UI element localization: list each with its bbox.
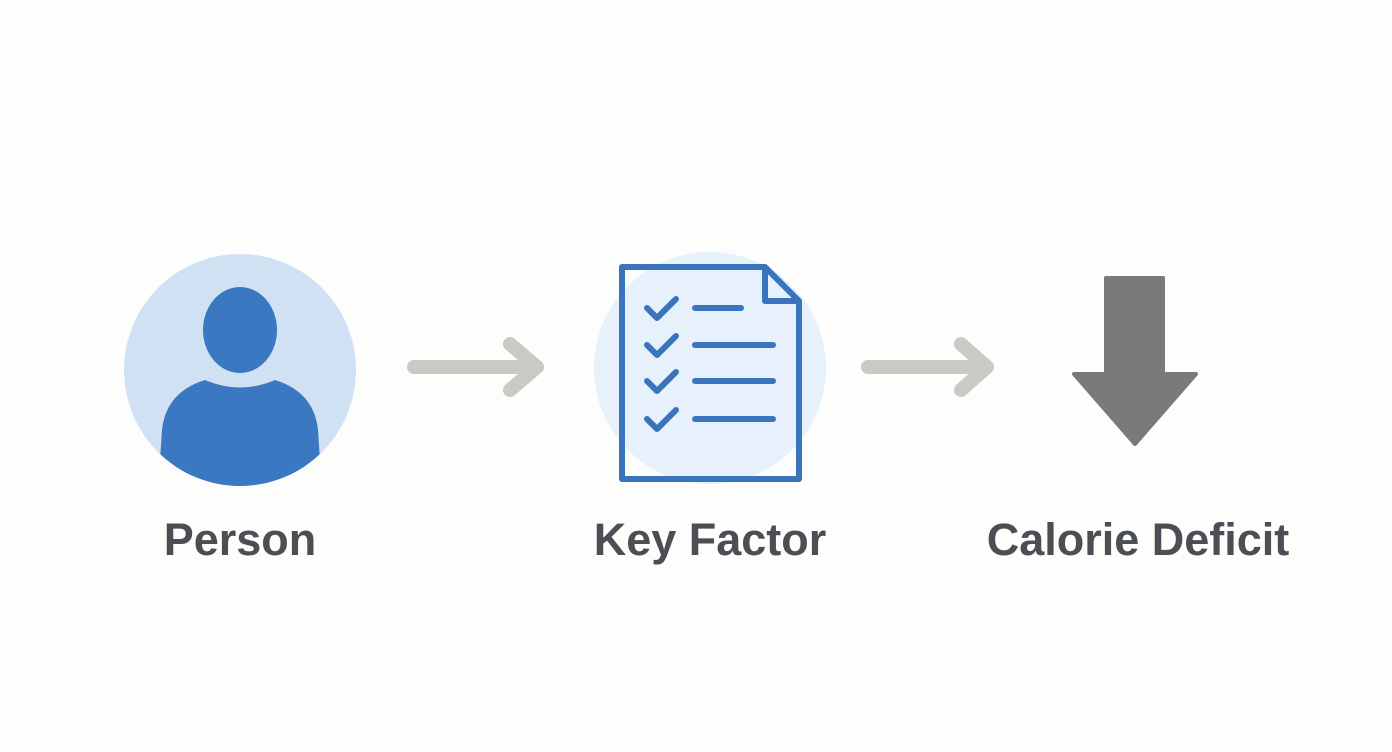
icon: checklist document <box>594 252 826 484</box>
arrow 1 <box>414 344 537 390</box>
label: Key Factor: Key Factor <box>594 514 826 565</box>
label: Calorie Deficit: Calorie Deficit <box>987 514 1289 565</box>
icon: person <box>124 254 356 490</box>
arrow 2 <box>868 344 987 390</box>
label: Person: Person <box>164 514 316 565</box>
icon: down arrow <box>1074 278 1196 444</box>
diagram graphics <box>124 252 1198 486</box>
